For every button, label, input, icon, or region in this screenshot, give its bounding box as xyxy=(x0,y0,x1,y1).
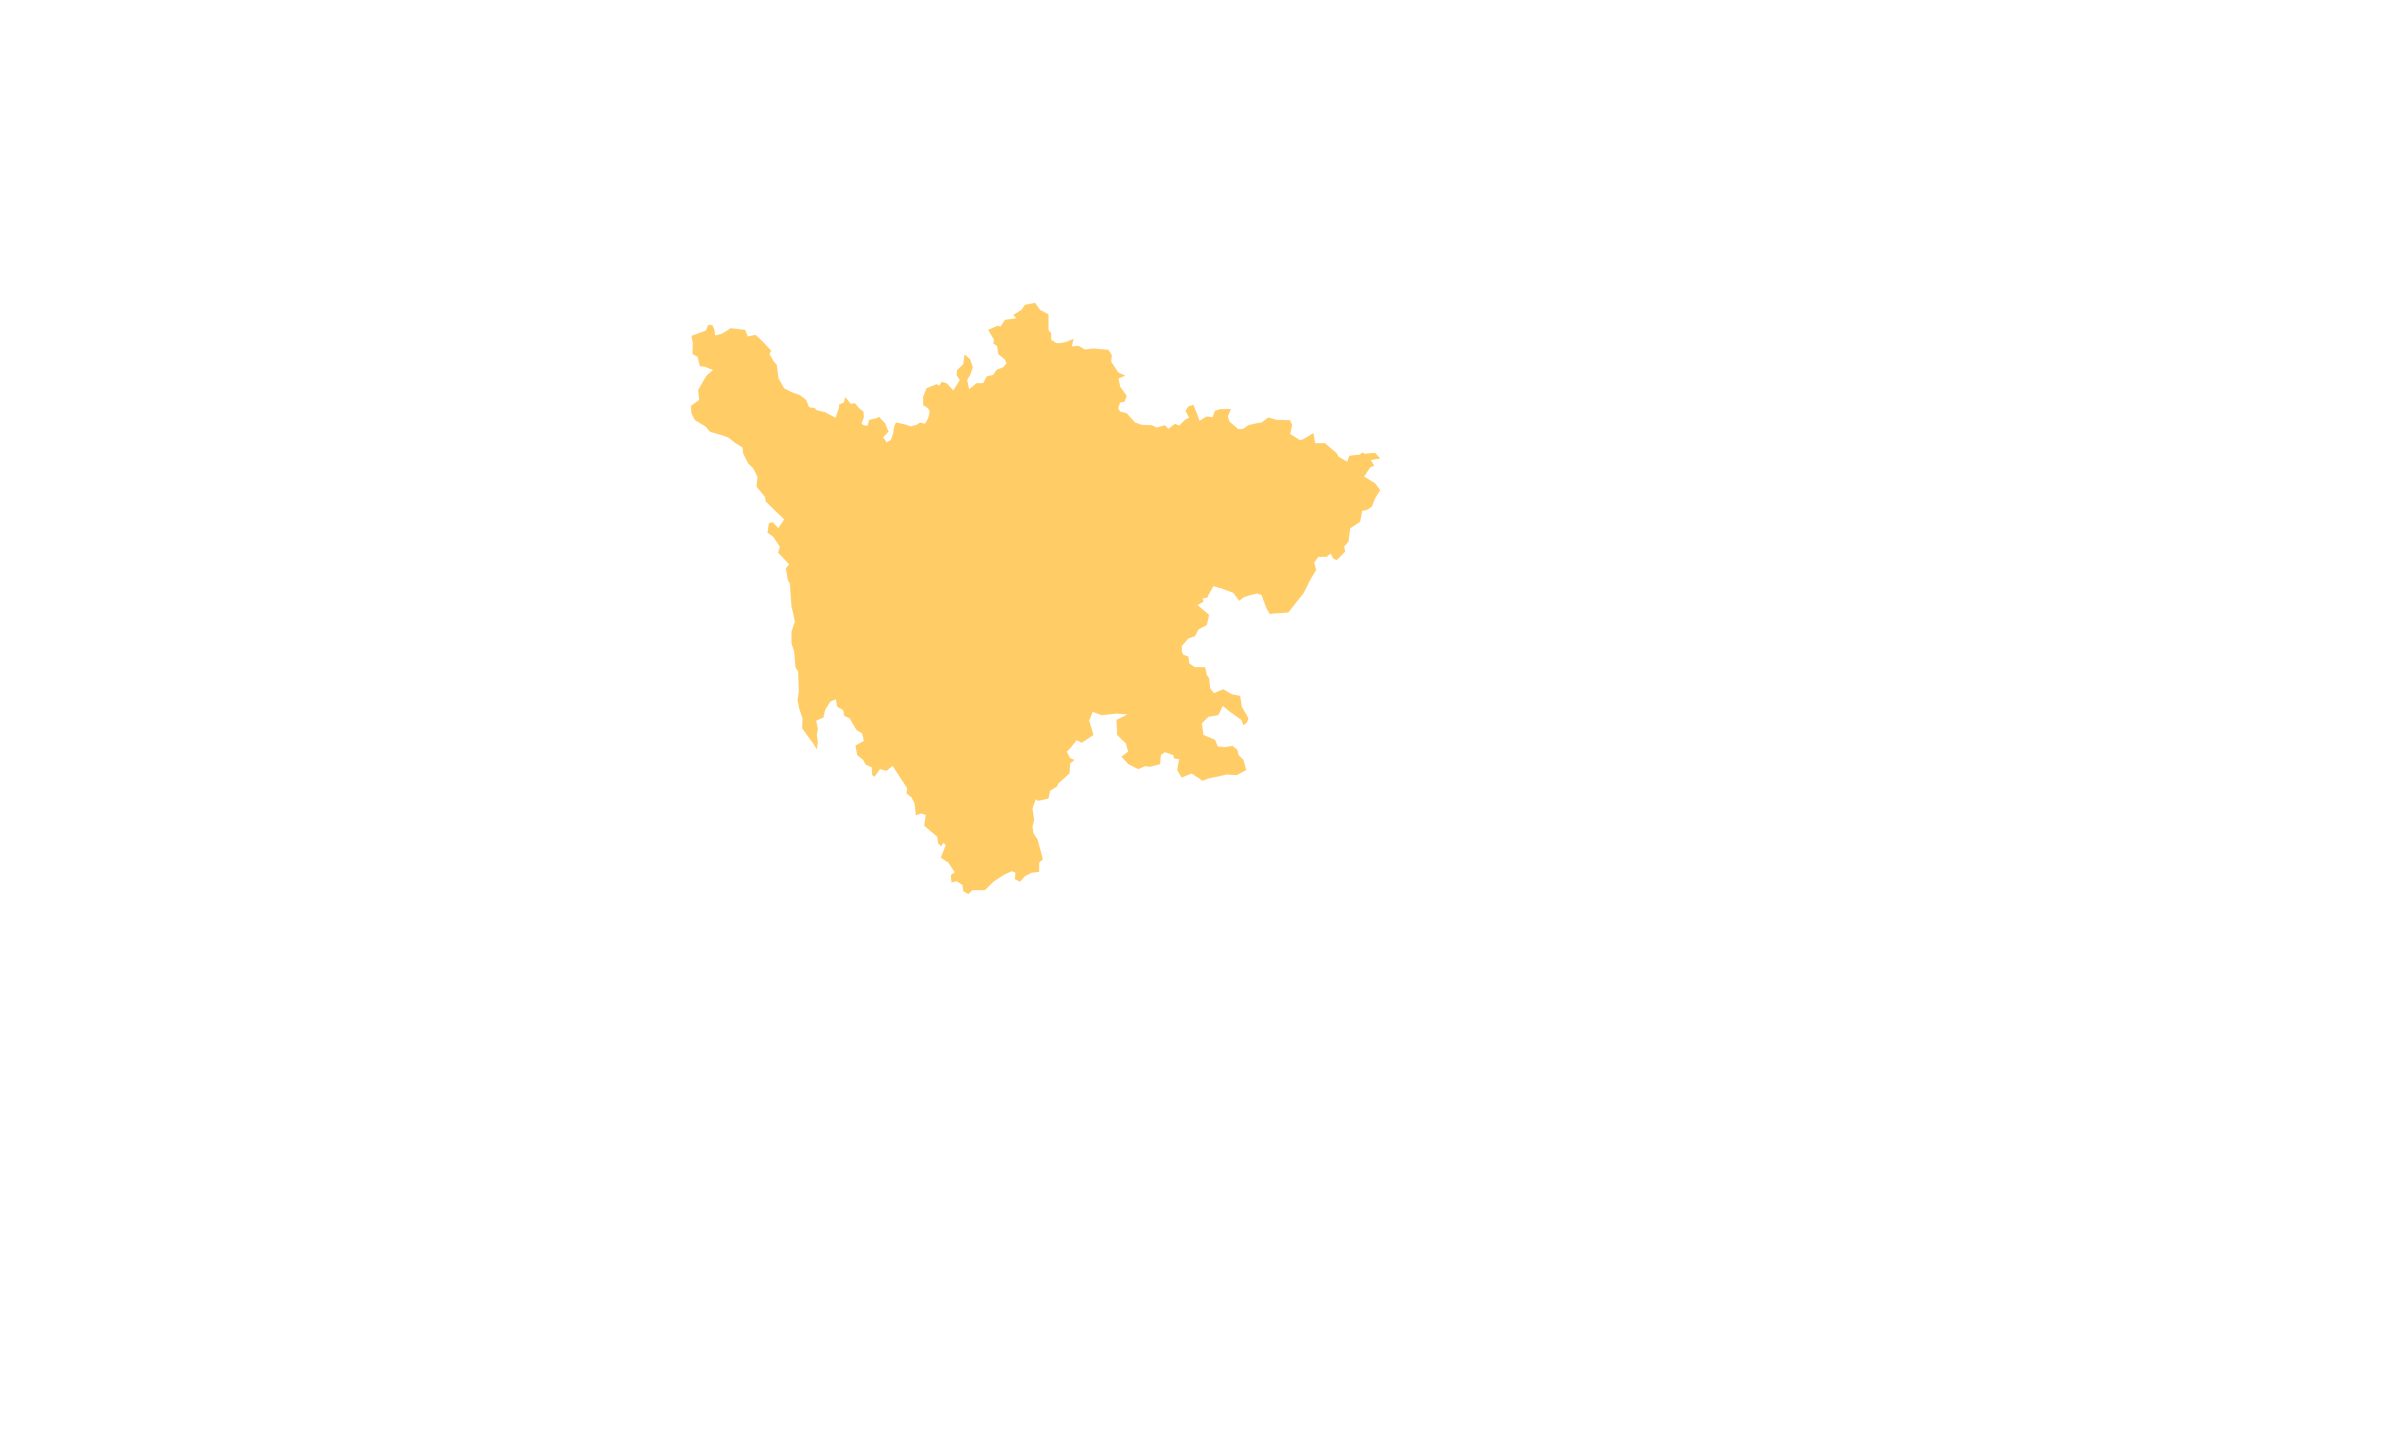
map: region silhouette xyxy=(691,303,1380,894)
